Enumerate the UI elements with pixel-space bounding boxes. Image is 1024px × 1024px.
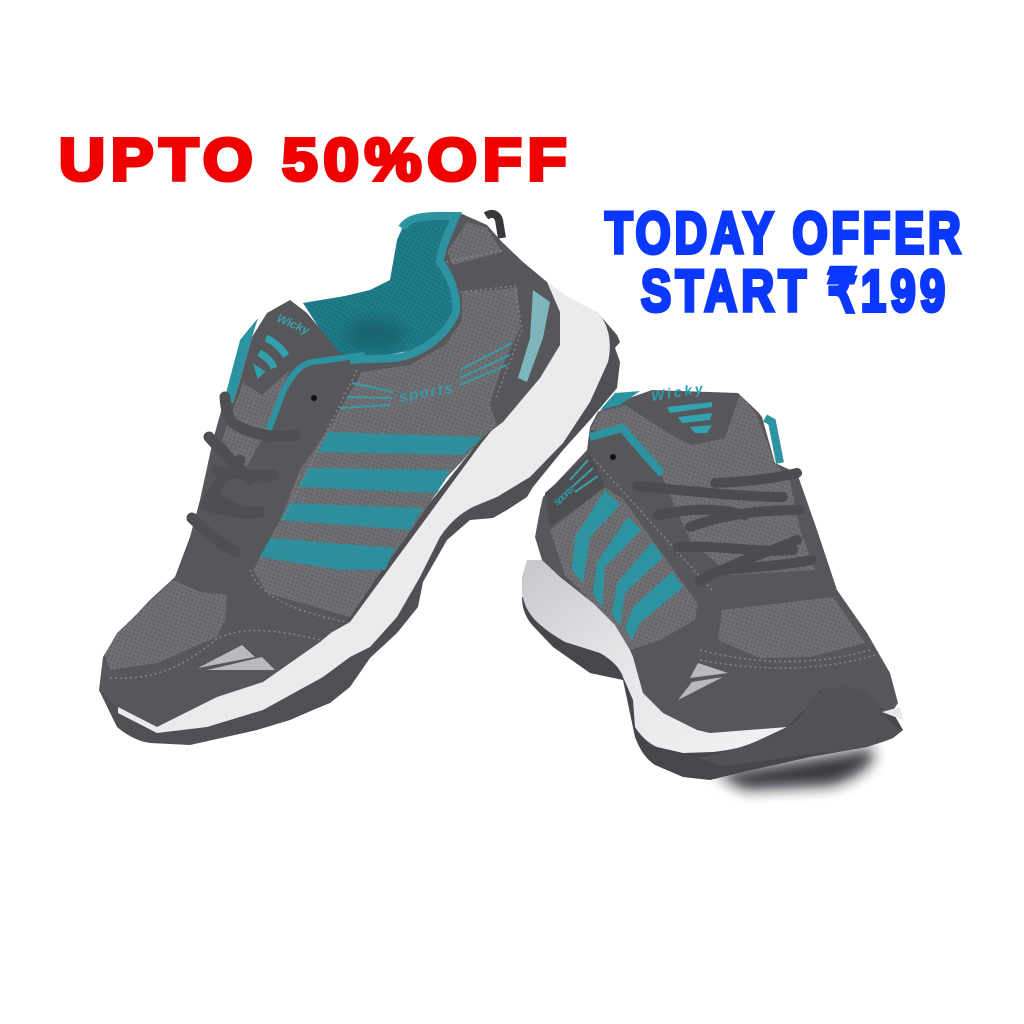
left shoe [99,213,620,745]
right shoe tongue logo [650,380,712,433]
right shoe eyestay [590,432,722,640]
left shoe collar opening [345,319,405,351]
right shoe outsole [522,580,903,780]
left shoe eyestay trim [268,355,365,432]
right shoe [522,380,903,790]
left shoe sports branding: sports [398,380,454,406]
right shoe tongue logo: Wicky [650,380,705,404]
right shoe laces [637,473,812,580]
left shoe outsole [99,312,620,745]
right shoe side logo [545,453,605,527]
right shoe eyelet [610,454,616,460]
right shoe upper [535,390,898,733]
left shoe heel mesh [447,222,502,265]
right shoe midsole [522,560,787,753]
left shoe throat mesh [222,370,290,470]
right shoe collar trim [590,418,780,474]
ground shadow [715,748,874,790]
left shoe teal stripes [260,432,483,570]
left shoe midsole [118,282,610,733]
left shoe sports branding [340,343,512,408]
offer text: start price: START ₹199 [641,260,945,324]
headline: upto 50% off: UPTO 50%OFF [59,127,567,193]
left shoe quarter mesh [253,288,520,617]
left shoe eyelet [311,395,317,401]
right shoe toe cap [700,687,903,766]
right shoe toe tip highlight [882,707,903,720]
offer text: today offer: TODAY OFFER [605,202,961,266]
right shoe teal stripes [572,490,683,640]
left shoe heel tab [518,290,550,382]
right shoe side mesh [550,487,700,650]
left shoe pull tab [486,214,502,238]
right shoe teal lining [600,391,640,410]
left shoe side lining [225,318,258,403]
left shoe laces [192,397,295,552]
left shoe collar lining [303,213,462,362]
right shoe tongue panel [622,393,738,445]
left shoe lining rim [350,216,456,360]
left shoe silver logo [198,645,275,670]
left shoe toe mesh [105,580,227,670]
right shoe silver logo [678,663,728,700]
right shoe side logo: sports [552,484,577,508]
left shoe tongue logo [255,311,313,377]
right shoe tongue mesh [590,395,815,575]
left shoe stitching [110,250,522,678]
right shoe stitching [590,455,875,668]
right shoe toe mesh [718,597,865,658]
left shoe tongue logo: Wicky [275,311,313,338]
left shoe upper [99,213,560,727]
